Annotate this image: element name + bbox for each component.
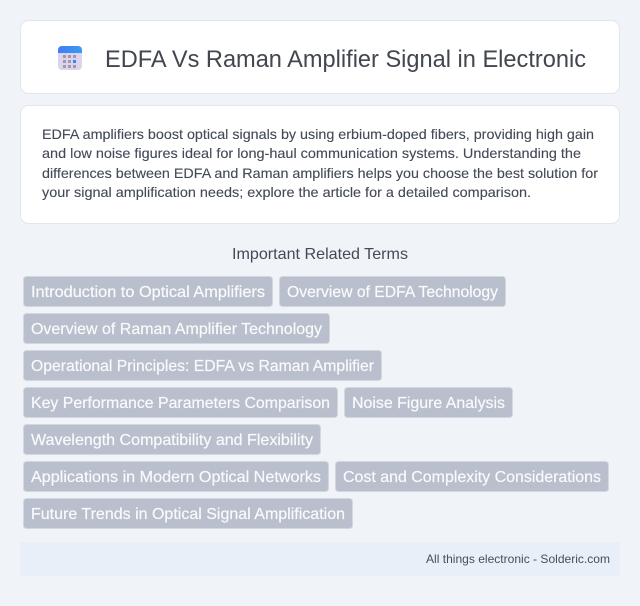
tag: EDFA overview <box>280 276 506 306</box>
tag: introduction <box>24 276 272 306</box>
title: EDFA Vs Raman Amplifier Signal in Electronic <box>105 46 586 73</box>
heading: related terms: Important Related Terms <box>232 246 408 263</box>
tag: cost <box>336 462 608 492</box>
text block: description <box>42 126 598 200</box>
tag: EDFA overview: Overview of EDFA Technology <box>287 284 498 301</box>
tag: wavelength: Wavelength Compatibility and Flexibility <box>31 432 313 449</box>
tag: future trends: Future Trends in Optical Signal Amplification <box>31 506 345 523</box>
tag: future trends <box>24 498 352 528</box>
text block: description: and low noise figures ideal for long-haul communication systems. Understanding the <box>42 145 581 161</box>
text block: description: differences between EDFA and Raman amplifiers helps you choose the best solution for <box>42 165 598 181</box>
text block: description: your signal amplification needs; explore the article for a detailed comparison. <box>42 184 531 200</box>
tag: applications <box>24 462 328 492</box>
tag: noise figure <box>344 388 512 418</box>
footer: All things electronic - Solderic.com <box>426 552 610 566</box>
tag list: related terms <box>24 276 608 528</box>
tag: introduction: Introduction to Optical Amplifiers <box>31 284 265 301</box>
tag: noise figure: Noise Figure Analysis <box>352 395 505 412</box>
panel: title card <box>20 20 620 94</box>
tag: applications: Applications in Modern Optical Networks <box>31 469 321 486</box>
icon: calendar <box>58 46 82 70</box>
tag: performance parameters <box>24 388 338 418</box>
tag: Raman overview <box>24 314 330 344</box>
panel: description card <box>20 106 620 224</box>
tag: operational principles: Operational Principles: EDFA vs Raman Amplifier <box>31 358 375 375</box>
tag: wavelength <box>24 424 320 454</box>
tag: operational principles <box>24 350 382 380</box>
text block: description: EDFA amplifiers boost optical signals by using erbium-doped fibers, providing high gain <box>42 126 594 142</box>
footer <box>20 542 620 576</box>
tag: Raman overview: Overview of Raman Amplifier Technology <box>31 321 322 338</box>
tag: cost: Cost and Complexity Considerations <box>343 469 601 486</box>
tag: performance parameters: Key Performance Parameters Comparison <box>31 395 330 412</box>
